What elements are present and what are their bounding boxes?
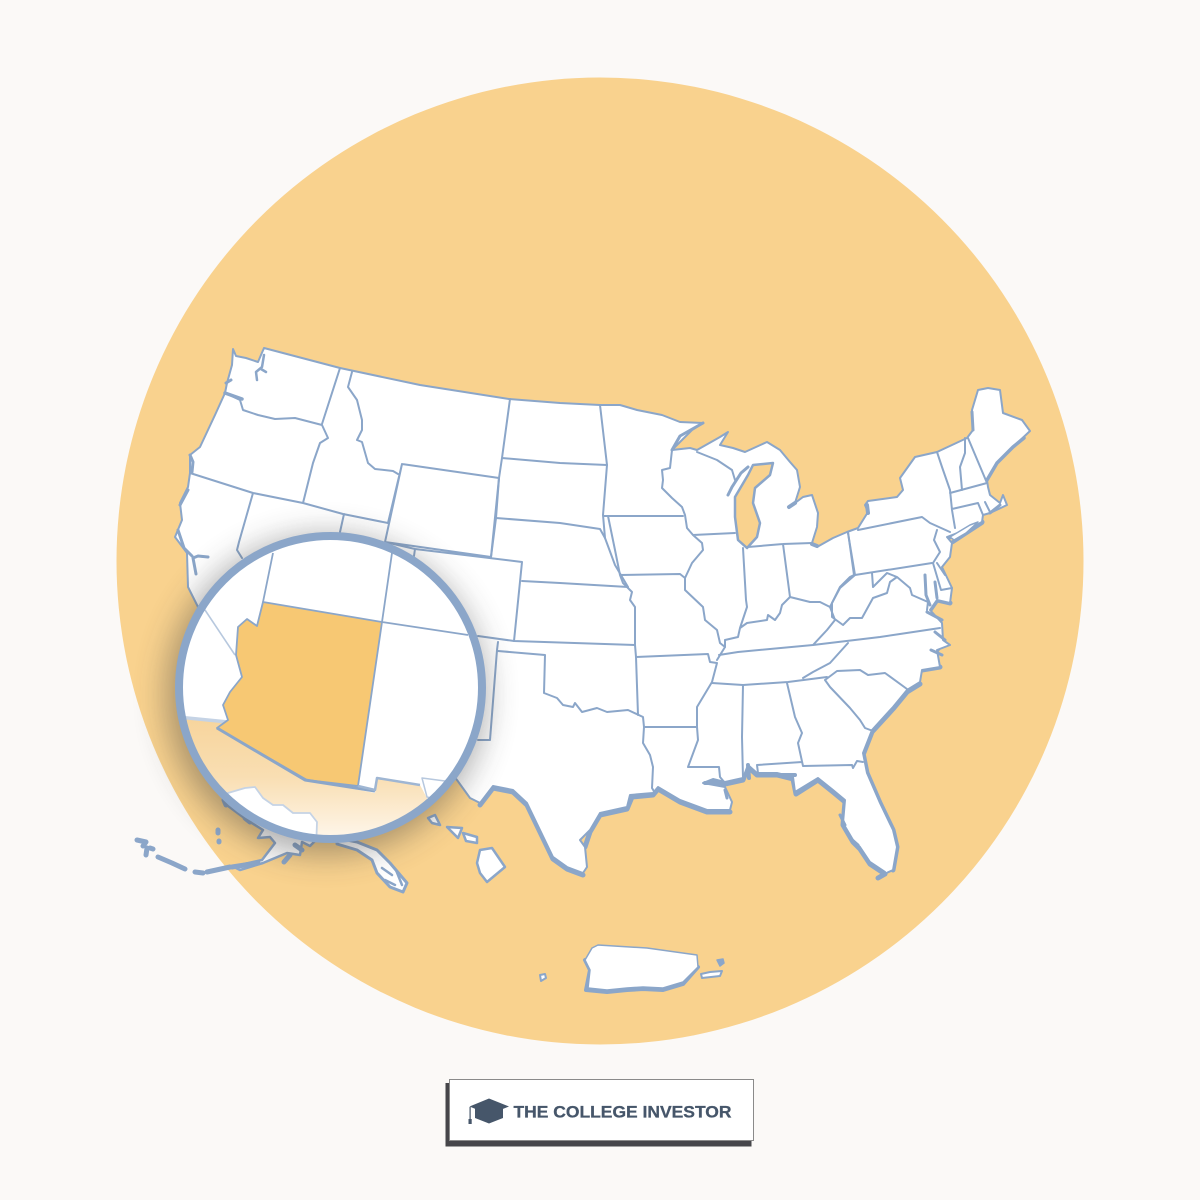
puerto rico (540, 945, 724, 992)
california southern border (178, 717, 228, 722)
aleutian islands (137, 840, 258, 873)
magnified alaska (227, 786, 318, 834)
orange background circle (116, 78, 1084, 1044)
puerto rico shadow (585, 960, 698, 992)
magnifier drop shadow (166, 535, 486, 855)
land mass (175, 348, 1030, 877)
california nevada border (205, 610, 235, 655)
magnified map contents (183, 540, 478, 835)
map of the United States (137, 348, 1030, 992)
texas corner (422, 778, 445, 800)
long island (950, 522, 978, 540)
puerto rico island (585, 945, 698, 990)
panhandle islands (382, 868, 402, 885)
badge box (450, 1080, 754, 1140)
alaska panhandle (337, 838, 407, 892)
icon: graduation cap (468, 1098, 509, 1124)
small islands (701, 971, 722, 978)
gulf and atlantic coast shadow (480, 522, 982, 878)
magnifier ring (179, 536, 482, 839)
alaska (137, 800, 407, 892)
alaska mainland (224, 800, 318, 870)
logo badge (446, 1080, 754, 1146)
badge shadow (446, 1083, 752, 1146)
white land base (183, 540, 478, 799)
magnifying glass (170, 530, 490, 860)
state borders (190, 368, 990, 793)
alaska small islands (218, 800, 302, 862)
coastal inlets and bays (178, 355, 1024, 845)
hawaii (428, 815, 505, 882)
arizona highlighted (217, 602, 382, 786)
orange area south of border (186, 720, 428, 835)
state borders in lens (263, 553, 468, 635)
arizona southern border (217, 728, 375, 791)
lake michigan (735, 463, 773, 548)
new mexico southern border (358, 778, 420, 790)
logo wordmark: THE COLLEGE INVESTOR (514, 1102, 732, 1122)
